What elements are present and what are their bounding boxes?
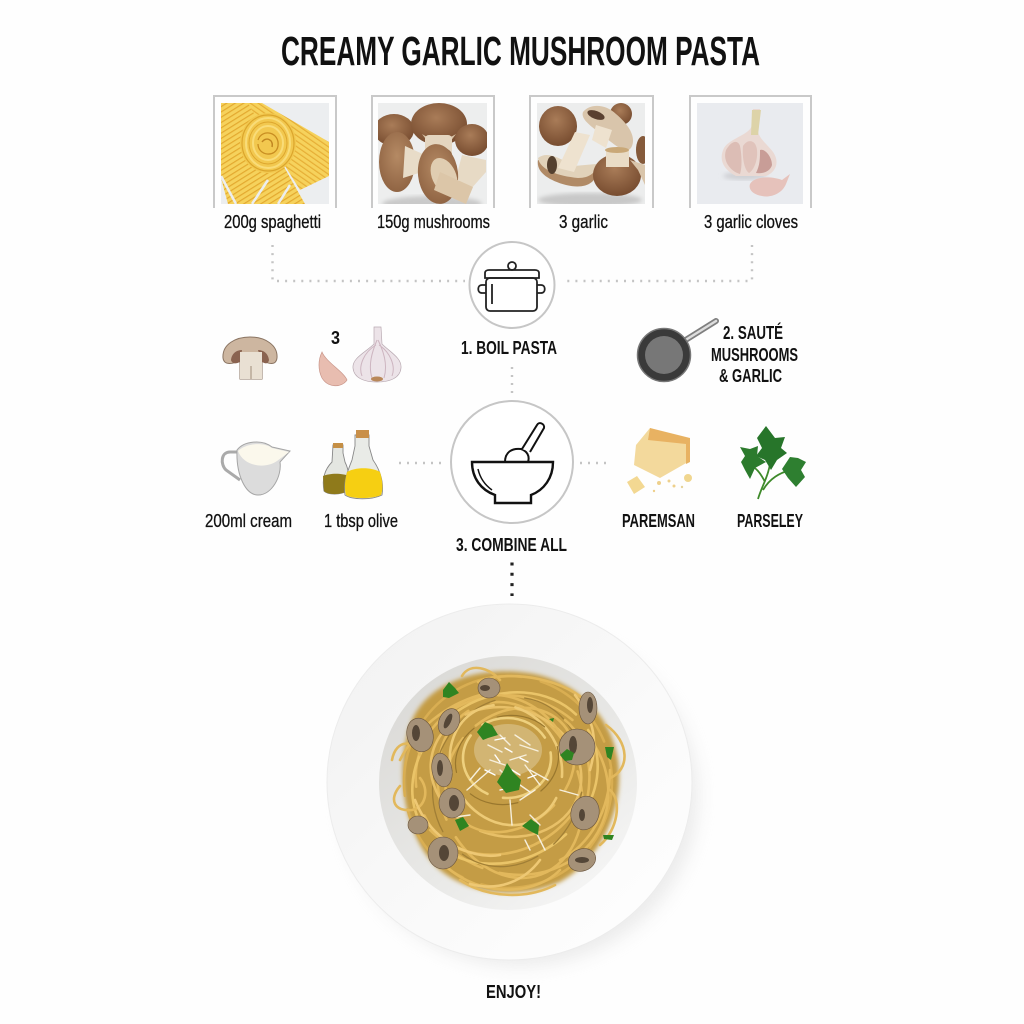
label: 3 garlic — [559, 212, 608, 232]
label: 3 garlic cloves — [704, 212, 798, 232]
step 2: saute — [638, 321, 798, 386]
closing label: ENJOY! — [486, 982, 541, 1002]
step label: 1. BOIL PASTA — [461, 338, 557, 358]
icon: olive oil bottles — [323, 430, 383, 499]
parsley garnish — [443, 682, 614, 840]
label: parmesan: PAREMSAN — [622, 511, 695, 531]
ingredient card: sliced mushrooms — [530, 96, 653, 232]
label: cream: 200ml cream — [205, 511, 292, 531]
icon: pan — [638, 321, 716, 382]
step label: MUSHROOMS — [711, 345, 798, 365]
connector: combine to plate — [510, 562, 514, 596]
icon: mushroom — [223, 337, 277, 379]
quantity: 3 — [331, 328, 340, 348]
finished dish — [327, 604, 698, 966]
step 3: combine all — [451, 401, 573, 555]
connector: left to combine — [399, 462, 612, 464]
connector: boil to combine — [511, 367, 513, 393]
panel: ingredient photos — [214, 96, 811, 232]
step 1: boil pasta — [461, 242, 557, 358]
label: parsley: PARSELEY — [737, 511, 803, 531]
ingredient card: garlic cloves — [690, 96, 811, 232]
ingredient card: spaghetti — [214, 96, 336, 232]
icon: bowl and spoon — [472, 423, 553, 503]
garlic clove — [319, 352, 347, 386]
icon: pot — [478, 262, 545, 311]
mushrooms — [403, 678, 603, 875]
label: 200g spaghetti — [224, 212, 321, 232]
icon: parsley — [740, 426, 806, 499]
label: olive: 1 tbsp olive — [324, 511, 398, 531]
plate — [327, 604, 692, 960]
icon: cream jug — [222, 442, 290, 495]
label: 150g mushrooms — [377, 212, 490, 232]
step label — [711, 322, 798, 386]
pasta — [381, 659, 638, 906]
parmesan shavings — [455, 724, 578, 850]
step label: & GARLIC — [719, 366, 782, 386]
connector: ingredients to boil step — [272, 245, 752, 281]
step label: 3. COMBINE ALL — [456, 535, 567, 555]
ingredient card: mushrooms — [372, 96, 494, 232]
step label: 2. SAUTÉ — [723, 322, 783, 343]
icon: parmesan — [627, 428, 692, 494]
title: CREAMY GARLIC MUSHROOM PASTA — [281, 28, 760, 74]
garlic bulb — [353, 327, 401, 382]
icon: three garlic — [319, 327, 401, 386]
